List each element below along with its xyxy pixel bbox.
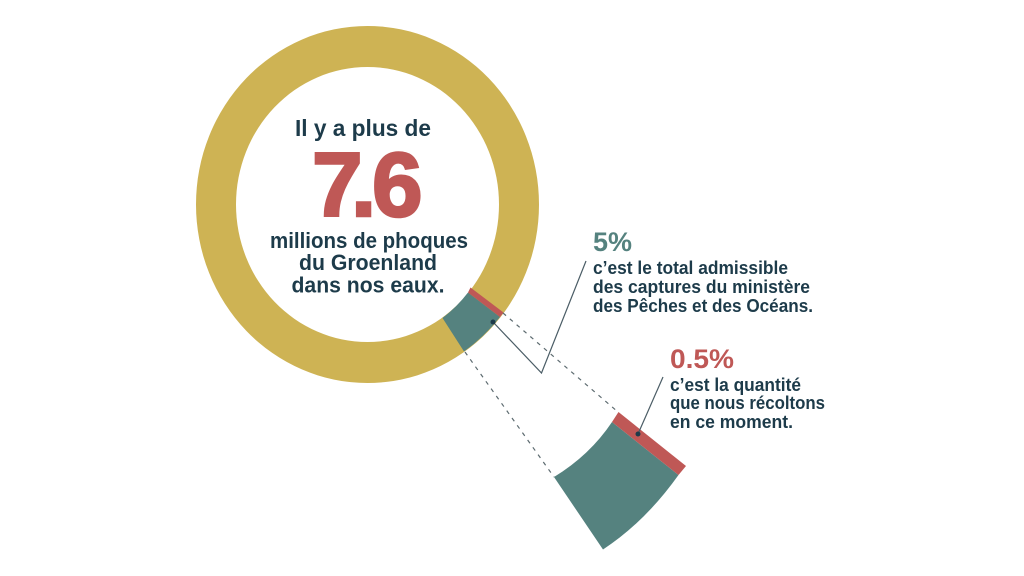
ring segment: 5% [442,292,500,352]
leader line: 5% [490,261,586,373]
description: du Groenland [299,250,437,275]
description: dans nos eaux. [292,272,444,298]
callout: 0.5% [670,344,825,432]
callout text: c’est le total admissible [593,257,788,278]
ring segment: 0.5% [468,288,504,317]
callout text: des Pêches et des Océans. [593,295,813,316]
ring: total seal population [196,26,539,383]
central text [270,115,468,298]
callout value: 5% [593,227,632,257]
heading line: Il y a plus de [295,115,431,141]
donut chart [196,26,539,383]
enlarged segment: 0.5% [612,412,686,475]
callout text [670,374,825,432]
leader line: 0.5% [636,377,663,436]
description: millions de phoques [270,228,468,253]
callout value: 0.5% [670,344,734,374]
callout text: que nous récoltons [670,392,825,413]
callout text [593,257,813,316]
callout text: en ce moment. [670,411,793,432]
enlarged sector [554,412,686,550]
enlarged segment: 5% [554,422,678,550]
callout text: des captures du ministère [593,276,810,297]
description [270,228,468,298]
dashed zoom lines [465,313,618,477]
big number: 7.6 [312,135,423,236]
callout: 5% [593,227,813,316]
callout text: c’est la quantité [670,374,801,395]
